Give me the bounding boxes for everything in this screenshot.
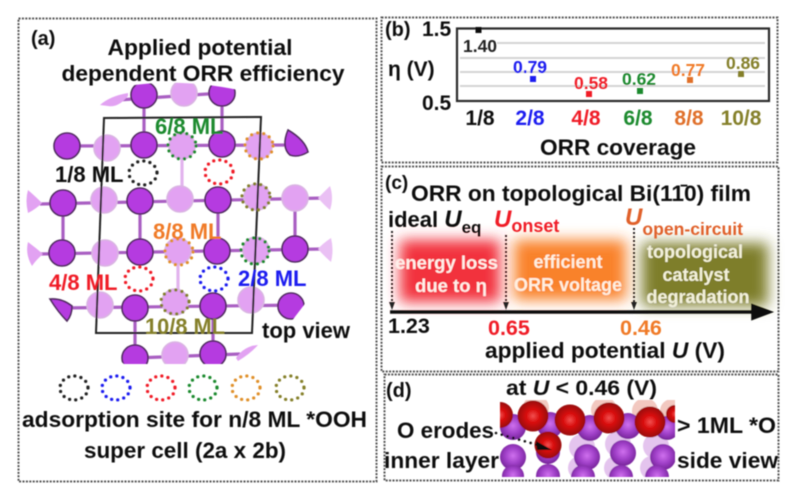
label: U onset: onset [511,216,559,236]
region: efficient ORR voltage: ORR voltage [514,275,622,295]
chart: scatter of eta values: 0.58 [574,73,608,93]
label: O erodes inner layer: O erodes [397,418,494,443]
label: U open-circuit: U [625,204,643,231]
dashed arrows to axis [392,228,634,306]
chart: scatter of eta values: 0.62 [622,69,656,89]
coverage labels on the lattice [49,114,306,339]
region: energy loss [395,240,500,302]
arrow: dotted pointer to eroding oxygen [496,433,552,450]
chart: scatter of eta values: 1.40 [463,36,497,56]
panel: (d) side view at U below 0.46 V [384,374,779,489]
panel label (c): (c) [385,173,408,194]
super cell outline [96,117,261,333]
region: topological catalyst degradation [642,242,768,307]
y axis labels: η (V) [388,58,435,81]
axis values: 1.23 [388,314,430,338]
region: energy loss: energy loss [395,252,498,273]
region: topological catalyst degradation: degradation [646,287,750,307]
label: top view: top view [262,318,351,343]
chart: scatter of eta values: 0.86 [726,53,760,73]
label: U onset: U [494,206,512,233]
region: efficient ORR voltage: efficient [533,252,603,272]
label: more than 1ML O, side view [677,413,779,473]
y axis labels [388,18,452,115]
label: O erodes inner layer [384,418,499,473]
diagram: top-view atomic lattice [26,80,332,371]
heading: panel a title [62,35,345,86]
adsorption site markers on the lattice [125,133,273,314]
x axis coverage labels: 8/8 [674,107,704,130]
panel label (b): (b) [385,19,411,41]
region: topological catalyst degradation: topological [647,242,743,262]
coverage labels on the lattice: 8/8 ML [153,219,221,244]
coverage labels on the lattice: 4/8 ML [49,270,117,295]
label: ideal U eq: ideal U [388,206,462,233]
x axis coverage labels: 1/8 [465,107,495,130]
region: topological catalyst degradation: catalyst [662,265,730,285]
region: efficient ORR voltage [514,240,626,300]
y axis labels: 1.5 [422,18,452,41]
x axis title: ORR coverage [540,135,696,160]
panel: (a) applied potential dependent ORR efficiency [18,18,376,482]
chart: scatter of eta values: 0.77 [671,60,705,80]
heading: potential condition: at U < 0.46 (V) [506,377,657,400]
panel label (d): (d) [386,380,412,402]
chart: scatter of eta values: 0.79 [513,57,547,77]
legend caption: adsorption site for n/8 ML *OOH [22,407,367,432]
axis values: 0.65 [488,316,530,340]
axis values [388,314,662,340]
panel: (c) ORR on topological Bi film [382,166,778,372]
label: ideal U eq: eq [462,218,481,237]
coverage labels on the lattice: 6/8 ML [155,114,223,139]
x axis coverage labels: 6/8 [623,107,653,130]
coverage labels on the lattice: 1/8 ML [55,162,123,187]
arrow: applied potential axis [390,306,769,318]
x axis coverage labels [465,107,762,130]
x axis coverage labels: 2/8 [515,107,545,130]
legend caption [22,407,367,463]
axis title: applied potential U (V) [485,338,725,363]
region: energy loss: due to η [415,275,487,296]
diagram: side view atoms [499,399,676,478]
x axis coverage labels: 4/8 [571,107,601,130]
chart: scatter of eta values [457,27,769,101]
coverage labels on the lattice: 10/8 ML [145,314,225,339]
label: O erodes inner layer: inner layer [384,448,499,473]
heading: panel c title: ORR on topological Bi(11̄0) film [411,181,751,206]
label: more than 1ML O, side view: > 1ML *O [677,413,776,438]
legend caption: super cell (2a x 2b) [84,438,286,463]
x axis coverage labels: 10/8 [721,107,762,130]
label: U open-circuit: open-circuit [642,219,743,239]
coverage labels on the lattice: 2/8 ML [238,266,306,291]
label: more than 1ML O, side view: side view [677,448,779,473]
y axis labels: 0.5 [422,92,452,115]
legend: dotted site markers [60,376,304,400]
heading: panel a title: Applied potential [108,35,292,60]
panel label (a): (a) [31,28,55,50]
axis values: 0.46 [620,316,662,340]
heading: panel a title: dependent ORR efficiency [62,61,345,86]
panel: (b) overpotential vs ORR coverage [382,18,778,162]
